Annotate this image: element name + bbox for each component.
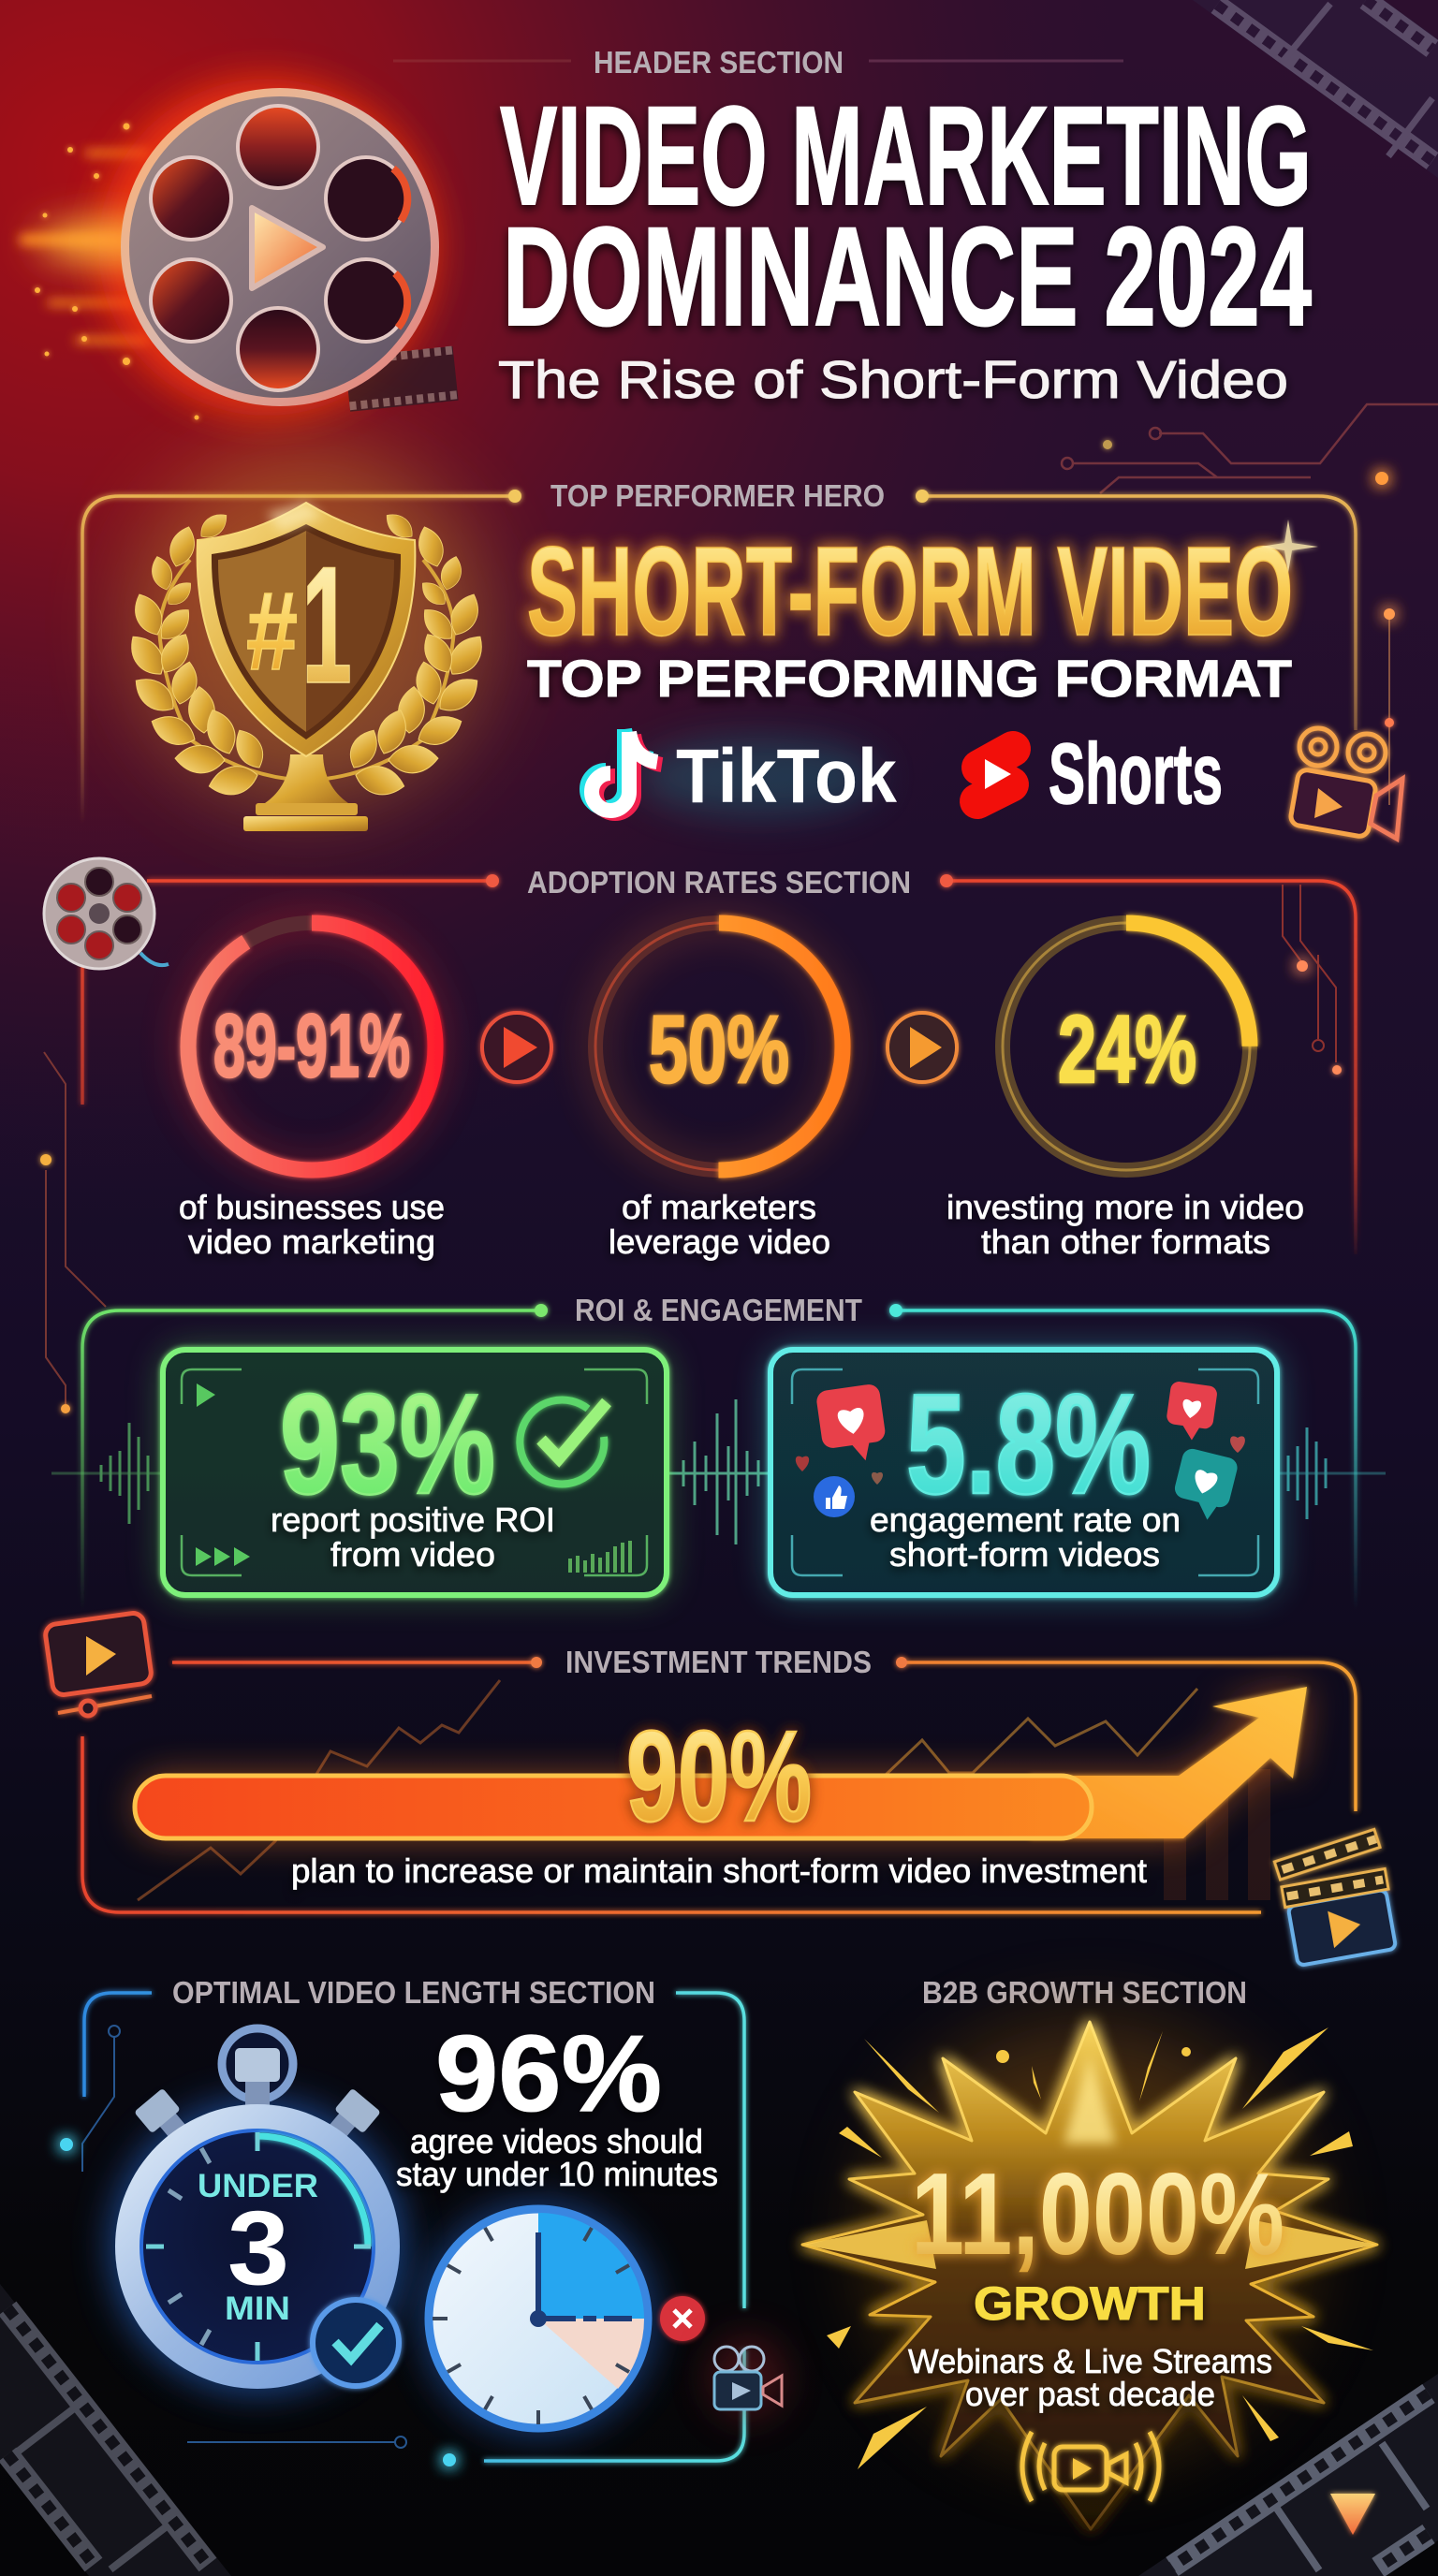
captions: adoption: leverage video xyxy=(609,1222,830,1261)
caption: investment: plan to increase or maintain short-form video investment xyxy=(291,1852,1147,1890)
circuit right of hero xyxy=(1384,608,1395,805)
panel: top performer hero xyxy=(82,449,1402,839)
investment panel border xyxy=(82,1662,1356,1912)
icon: orange play triangle in film strip xyxy=(1330,2494,1375,2535)
hero label dots xyxy=(508,490,929,503)
arrow button 1 xyxy=(482,1013,551,1082)
adoption label: ADOPTION RATES SECTION xyxy=(527,865,911,900)
sparkle xyxy=(1260,520,1318,573)
ring: 89-91%: 89-91% xyxy=(213,996,410,1096)
title xyxy=(500,77,1312,355)
film strip: bottom right xyxy=(1138,2374,1438,2576)
investment label: INVESTMENT TRENDS xyxy=(565,1645,872,1679)
icon: number one shield with laurels xyxy=(123,449,491,831)
panel: ROI and engagement xyxy=(51,1293,1386,1610)
logo: TikTok xyxy=(587,729,897,819)
icon: film reel hero xyxy=(19,79,459,419)
caption: 96%: stay under 10 minutes xyxy=(396,2155,718,2193)
film strip: bottom left xyxy=(0,2284,231,2576)
B2B label: B2B GROWTH SECTION xyxy=(922,1975,1247,2010)
hero panel border xyxy=(82,496,1356,824)
logo: YouTube Shorts xyxy=(977,726,1223,822)
caption: ROI xyxy=(271,1500,555,1573)
panel: adoption rates xyxy=(40,858,1356,1413)
panel: optimal video length xyxy=(60,1975,786,2466)
caption: B2B xyxy=(908,2342,1272,2413)
hero subheading: TOP PERFORMING FORMAT xyxy=(527,649,1292,708)
header label: HEADER SECTION xyxy=(594,45,844,80)
ROI label dots xyxy=(535,1304,902,1317)
hero label: TOP PERFORMER HERO xyxy=(550,478,885,513)
captions: adoption: video marketing xyxy=(188,1222,435,1261)
stat: 5.8%: 5.8% xyxy=(906,1365,1151,1524)
adoption label dots xyxy=(486,874,953,887)
icon: number one shield with laurels: 1 xyxy=(301,532,352,718)
ring: 24% xyxy=(1003,923,1250,1170)
ring: 50%: 50% xyxy=(649,996,789,1103)
captions: adoption: investing more in video xyxy=(946,1188,1304,1226)
growth heading: GROWTH xyxy=(974,2277,1206,2330)
subtitle: The Rise of Short-Form Video xyxy=(498,350,1288,410)
captions: adoption: of businesses use xyxy=(179,1188,445,1226)
icon: stopwatch under 3 min xyxy=(110,2028,404,2393)
card: positive ROI xyxy=(163,1350,667,1595)
icon: stopwatch under 3 min: UNDER xyxy=(198,2168,318,2204)
icon: stopwatch under 3 min: MIN xyxy=(225,2291,290,2327)
ring: 24%: 24% xyxy=(1058,996,1196,1103)
film strip: top right xyxy=(1193,0,1438,178)
investment label dots xyxy=(531,1657,907,1668)
caption: B2B: Webinars & Live Streams xyxy=(908,2342,1272,2380)
caption: 96%: agree videos should xyxy=(410,2122,703,2160)
icon: clapperboard xyxy=(1272,1829,1399,1967)
captions: adoption: than other formats xyxy=(981,1222,1270,1261)
caption: engagement xyxy=(870,1500,1181,1573)
circuit dots: top right xyxy=(1103,440,1388,485)
caption: engagement: short-form videos xyxy=(889,1535,1160,1573)
background line chart xyxy=(138,1680,1259,1900)
stat: 90%: 90% xyxy=(626,1705,812,1849)
waveforms xyxy=(51,1399,1386,1544)
icon: broadcast camera xyxy=(1022,2432,1159,2501)
logo: YouTube Shorts: Shorts xyxy=(1049,726,1223,822)
icon: red x xyxy=(660,2296,705,2341)
ROI panel border xyxy=(82,1310,1356,1610)
logo: TikTok: TikTok xyxy=(676,734,897,819)
stat: 90%: 90% xyxy=(626,1705,812,1849)
adoption panel border xyxy=(82,881,1356,1254)
ring: 89-91% xyxy=(188,923,435,1170)
caption: B2B: over past decade xyxy=(965,2375,1215,2413)
icon: small film reel xyxy=(44,858,169,969)
caption: engagement: engagement rate on xyxy=(870,1500,1181,1539)
circuit details xyxy=(60,2026,456,2466)
stat: 96%: 96% xyxy=(435,2012,662,2134)
icon: check circle xyxy=(520,1399,607,1484)
ROI label: ROI & ENGAGEMENT xyxy=(575,1293,862,1327)
panel: B2B growth xyxy=(802,1975,1377,2529)
stat: 11,000%: 11,000% xyxy=(911,2150,1284,2279)
icon: movie camera xyxy=(1289,728,1402,839)
stat: 11,000%: 11,000% xyxy=(911,2150,1284,2279)
progress bar with arrow xyxy=(135,1687,1307,1838)
icon: clock xyxy=(421,2202,655,2436)
caption: ROI: from video xyxy=(330,1535,495,1573)
arrow button 2 xyxy=(888,1013,957,1082)
icon: number one shield with laurels: # xyxy=(246,569,298,694)
icons: hearts and like xyxy=(796,1381,1245,1524)
captions: adoption xyxy=(179,1188,1304,1261)
caption: 96% xyxy=(396,2122,718,2193)
card: engagement rate xyxy=(770,1350,1277,1595)
length panel border xyxy=(84,1993,744,2461)
length label: OPTIMAL VIDEO LENGTH SECTION xyxy=(172,1975,655,2010)
small film strip behind reel xyxy=(345,346,459,412)
captions: adoption: of marketers xyxy=(622,1188,816,1226)
panel: investment trends xyxy=(44,1612,1399,1967)
circuit lines: top right xyxy=(1062,404,1438,493)
ring: 50% xyxy=(595,923,843,1170)
caption: ROI: report positive ROI xyxy=(271,1500,555,1539)
icon: video player xyxy=(44,1612,153,1716)
stat: 93%: 93% xyxy=(280,1365,495,1524)
circuit left of adoption xyxy=(40,1052,106,1413)
icon: small video camera xyxy=(708,2334,786,2421)
burst xyxy=(802,2022,1377,2529)
circuit right of adoption xyxy=(1283,885,1342,1075)
icon: stopwatch under 3 min: 3 xyxy=(227,2189,289,2306)
